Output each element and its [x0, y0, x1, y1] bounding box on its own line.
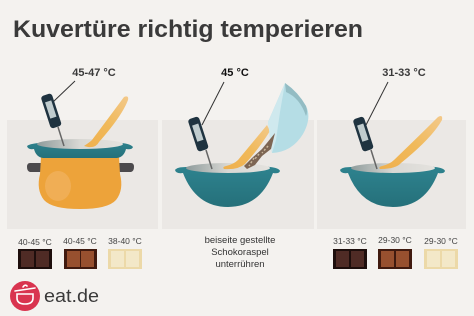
icon: bowl 3: [340, 163, 445, 207]
icon: thermometer 3: [353, 82, 388, 169]
swatches: left chocolates: [18, 249, 142, 269]
text: instruction: [205, 235, 275, 270]
text: instruction: Schokoraspel: [211, 247, 269, 258]
icon: spoon 3: [379, 116, 442, 169]
text: instruction: unterrühren: [215, 259, 265, 270]
legend: right temperatures: 29-30 °C: [424, 236, 458, 246]
icon: thermometer 2: [188, 82, 224, 169]
icon: chocolate shavings: [244, 133, 275, 169]
panel: step 3: [317, 67, 466, 229]
legend: left temperatures: 38-40 °C: [108, 236, 142, 246]
legend: left temperatures: [18, 236, 142, 247]
swatches: right chocolates: [333, 249, 458, 269]
icon: bowl 2: [175, 163, 280, 207]
label: temperature 1: 45-47 °C: [72, 67, 116, 79]
icon: thermometer 1: [41, 81, 75, 146]
icon: spoon 2: [223, 125, 270, 169]
panel: step 1: [7, 67, 158, 229]
logo: eat.de: eat.de: [44, 286, 99, 306]
legend: right temperatures: 31-33 °C: [333, 236, 367, 246]
legend: left temperatures: 40-45 °C: [63, 236, 97, 246]
text: instruction: beiseite gestellte: [205, 235, 275, 246]
icon: pot with bowl: [27, 139, 134, 209]
label: temperature 2: 45 °C: [221, 67, 249, 79]
icon: spoon 1: [84, 96, 128, 147]
label: temperature 3: 31-33 °C: [382, 67, 426, 79]
legend: right temperatures: 29-30 °C: [378, 235, 412, 245]
title: Kuvertüre richtig temperieren: [13, 16, 363, 43]
legend: left temperatures: 40-45 °C: [18, 237, 52, 247]
panel: step 2: [162, 67, 314, 229]
icon: tilted bowl: [268, 83, 308, 153]
logo: eat.de: [10, 281, 99, 311]
legend: right temperatures: [333, 235, 458, 246]
